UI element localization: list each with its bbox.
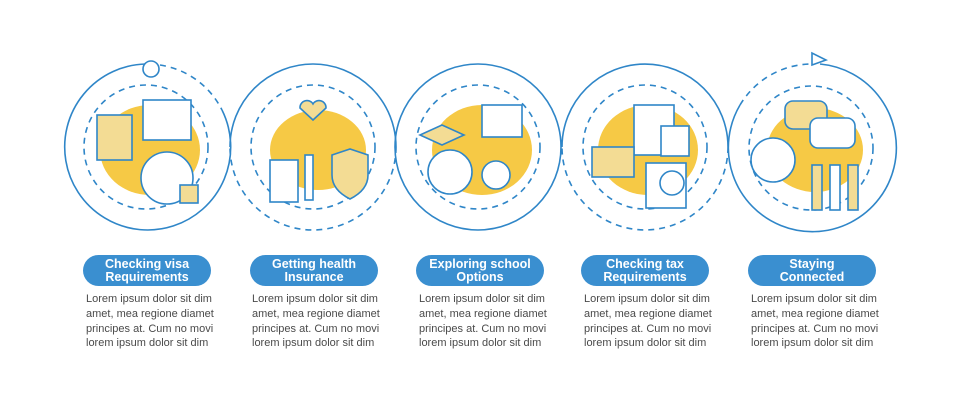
text 1: Lorem ipsum dolor sit dim amet, mea regione diamet principes at. Cum no movi lorem ipsum dolor sit dim [86,293,214,349]
text 2: Lorem ipsum dolor sit dim amet, mea regione diamet principes at. Cum no movi lorem ipsum dolor sit dim [252,293,380,349]
step 3 circle [395,64,561,230]
step 2 circle [230,64,396,230]
pill 5: Connected [780,270,844,284]
text 4: Lorem ipsum dolor sit dim amet, mea regione diamet principes at. Cum no movi lorem ipsum dolor sit dim [584,293,712,349]
step 1 circle [65,61,231,230]
icon: tax [592,105,689,208]
pill 4: Requirements [603,270,687,284]
text 5: Lorem ipsum dolor sit dim amet, mea regione diamet principes at. Cum no movi lorem ipsum dolor sit dim [751,293,879,349]
pill 3 [416,255,544,286]
icon: connected [751,101,858,210]
pill 1 [83,255,211,286]
pill 3: Exploring school [429,256,531,270]
pill 2: Getting health [272,256,356,270]
pill 4: Checking tax [606,256,684,270]
step 5 circle [728,53,896,232]
icon: passport and globe [97,100,198,204]
pill 5 [748,255,876,286]
pill 1: Requirements [105,270,189,284]
pill 2: Insurance [284,270,344,284]
pill 1: Checking visa [105,256,189,270]
pill 4 [581,255,709,286]
pill 3: Options [456,270,504,284]
icon: health [270,101,368,202]
step 4 circle [562,64,728,230]
pill 5: Staying [789,256,835,270]
pill 2 [250,255,378,286]
icon: school [420,105,522,194]
text 3: Lorem ipsum dolor sit dim amet, mea regione diamet principes at. Cum no movi lorem ipsum dolor sit dim [419,293,547,349]
diagram circles [64,52,898,232]
